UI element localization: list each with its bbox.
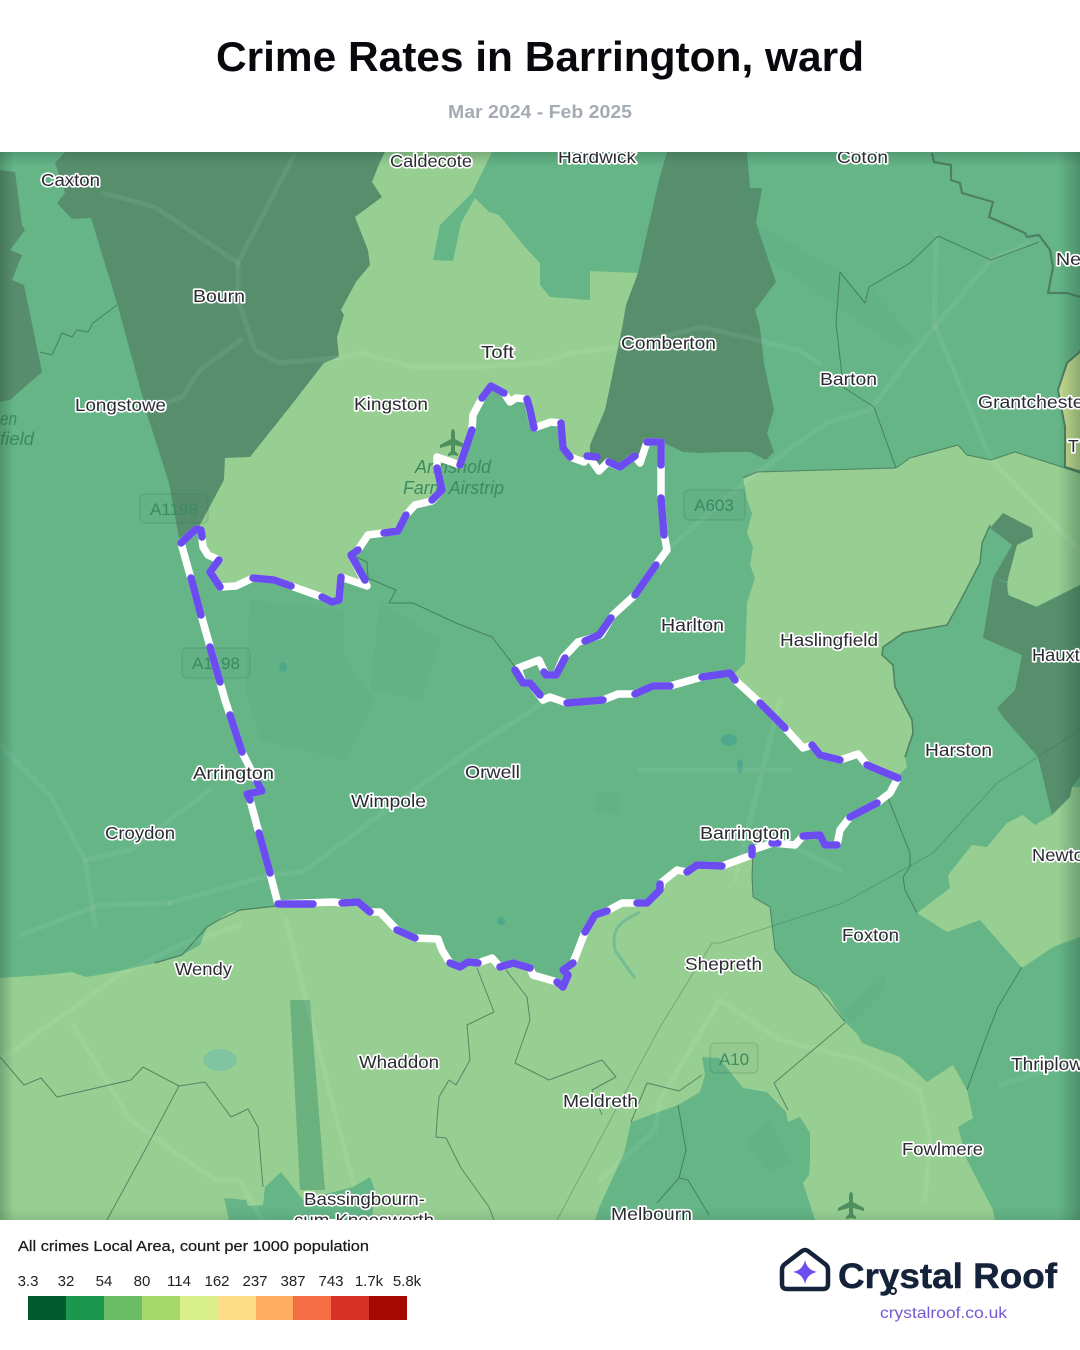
place name labels: Haslingfield — [780, 630, 878, 650]
place label: cut-off airfield name — [0, 415, 34, 445]
road badge: A1198 north — [140, 494, 208, 523]
place name labels: Ne — [1056, 249, 1080, 269]
road badge: A603 — [684, 490, 745, 520]
place name labels: Barton — [820, 369, 877, 389]
district boundary lines — [0, 236, 1080, 1220]
place name labels: Arrington — [193, 763, 274, 783]
place name labels: Hardwick — [558, 147, 636, 167]
place name labels: Caxton — [41, 170, 100, 190]
place name labels: T — [1068, 436, 1079, 456]
region: Haslingfield light area — [735, 445, 1080, 790]
place name labels: Whaddon — [359, 1052, 439, 1072]
place name labels: Harston — [925, 740, 992, 760]
legend: scale values: 3.3 — [18, 1273, 38, 1290]
region: small dark patch by the river — [990, 513, 1033, 582]
road badge: A1198 north: A1198 — [150, 500, 198, 519]
legend: scale values: 80 — [134, 1273, 150, 1290]
place name labels: Shepreth — [685, 954, 762, 974]
place name labels: Thriplow — [1011, 1054, 1080, 1074]
place label: airstrip: Farm Airstrip — [403, 478, 504, 498]
legend: scale values: 5.8k — [393, 1273, 422, 1290]
road badge: A603: A603 — [694, 496, 734, 515]
logo wordmark: Crystal Roof — [838, 1257, 1057, 1296]
map edge vignette — [0, 152, 1080, 1220]
place name labels: Fowlmere — [902, 1139, 983, 1159]
road badge: A1198 south: A1198 — [192, 654, 240, 673]
icon: airfield plane south — [838, 1192, 864, 1219]
place name labels: Harlton — [661, 615, 724, 635]
legend: scale values: 162 — [204, 1273, 230, 1290]
water bodies — [203, 662, 743, 1071]
ward outline: purple dashes — [181, 386, 898, 987]
place name labels: Longstowe — [75, 395, 166, 415]
place name labels: Kingston — [354, 394, 428, 414]
place name labels: cum-Kneesworth — [294, 1210, 434, 1230]
place name labels: Barrington — [700, 823, 790, 843]
region: Bourn dark area — [55, 152, 385, 538]
road badge: A10: A10 — [719, 1050, 749, 1069]
legend: scale values: 54 — [96, 1273, 112, 1290]
region: far west dark area — [0, 170, 42, 402]
legend: scale values — [18, 1273, 422, 1290]
place name labels: Bassingbourn- — [304, 1189, 425, 1209]
legend: scale values: 1.7k — [355, 1273, 384, 1290]
region: Bassingbourn mid green area — [224, 1172, 375, 1220]
legend: scale values: 387 — [280, 1273, 306, 1290]
place name labels: Wimpole — [351, 791, 426, 811]
legend: colour scale bar — [28, 1296, 407, 1320]
region: Kingston and Toft light area — [200, 152, 638, 605]
place name labels: Foxton — [842, 925, 899, 945]
place name labels: Comberton — [621, 333, 716, 353]
region: far east pale yellow area — [1058, 350, 1080, 472]
legend: scale values: 743 — [318, 1273, 344, 1290]
place label: cut-off airfield name: field — [0, 429, 35, 449]
place name labels: Wendy — [175, 959, 232, 979]
legend: scale values: 114 — [167, 1273, 191, 1290]
legend: scale values: 32 — [58, 1273, 74, 1290]
road badge: A1198 south — [182, 648, 250, 678]
region: Comberton dark area — [590, 152, 776, 470]
region: south light area — [0, 835, 995, 1220]
region: Newton light area — [917, 787, 1080, 968]
boundary: thick top-right district line — [932, 153, 1080, 297]
ward outline: white base — [181, 386, 898, 987]
place label: airstrip: Armshold — [414, 457, 492, 477]
place name labels: Caldecote — [390, 151, 472, 171]
place label: airstrip — [403, 457, 504, 498]
place name labels: Coton — [837, 147, 888, 167]
ward fill: Barrington — [181, 386, 898, 987]
place name labels: Orwell — [465, 762, 520, 782]
region: Hauxton dark area — [983, 578, 1080, 815]
land-use patches — [290, 1000, 325, 1190]
roads — [0, 157, 1080, 1220]
place name labels: Melbourn — [611, 1204, 692, 1224]
place name labels: Toft — [481, 342, 514, 362]
place name labels: Grantchester — [978, 392, 1080, 412]
icon: Crystal Roof house logo — [782, 1250, 828, 1289]
legend title: All crimes Local Area, count per 1000 population — [18, 1238, 369, 1255]
subtitle: date range: Mar 2024 - Feb 2025 — [448, 102, 632, 122]
region: Melbourn mid green area — [595, 1057, 815, 1220]
website url: crystalroof.co.uk — [880, 1305, 1008, 1322]
place name labels: Bourn — [193, 286, 245, 306]
icon: airfield plane north — [440, 429, 466, 456]
place name labels: Croydon — [105, 823, 175, 843]
place label: cut-off airfield name: en — [0, 409, 17, 429]
map base: mid green areas — [0, 152, 1080, 1220]
legend: scale values: 237 — [242, 1273, 268, 1290]
road badge: A10 — [710, 1043, 758, 1073]
title: Crime Rates in Barrington, ward — [216, 33, 864, 80]
place name labels — [41, 147, 1080, 1230]
place name labels: Meldreth — [563, 1091, 638, 1111]
